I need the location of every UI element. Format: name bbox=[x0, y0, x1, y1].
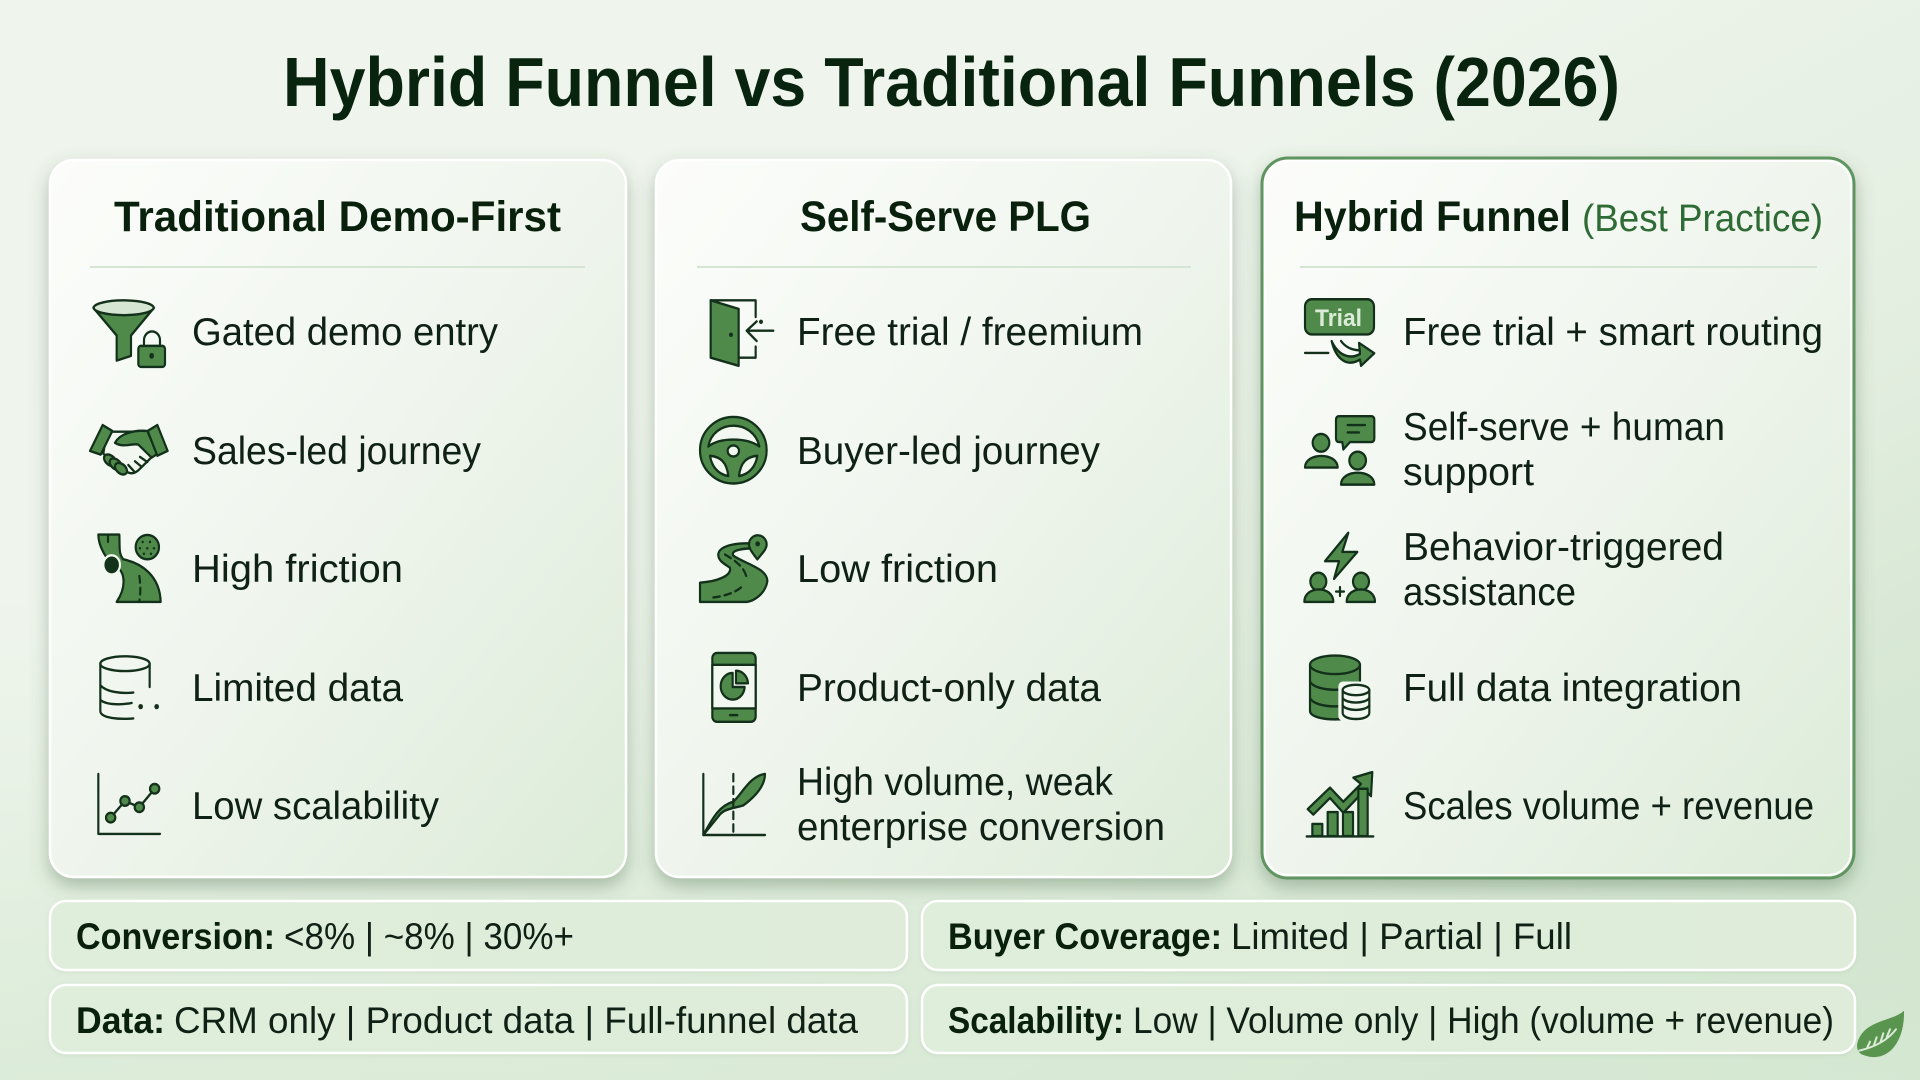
text: Full data integration: Full data integration bbox=[1403, 667, 1742, 710]
text: Self-serve + human support bbox=[1403, 406, 1725, 494]
icon: open door bbox=[711, 300, 773, 366]
text: Behavior-triggered assistance: assistance bbox=[1403, 571, 1576, 614]
text: Behavior-triggered assistance bbox=[1403, 526, 1724, 614]
summary: Conversion bbox=[50, 901, 907, 970]
summary: Scalability: Scalability: bbox=[948, 1000, 1124, 1041]
text: High friction: High friction bbox=[192, 548, 403, 591]
heading: Self-Serve PLG: Self-Serve PLG bbox=[800, 193, 1091, 241]
text: High volume, weak enterprise conversion bbox=[797, 761, 1165, 849]
icon: full database bbox=[1310, 656, 1373, 721]
summary: Buyer Coverage: Buyer Coverage: bbox=[948, 916, 1222, 957]
text: Sales-led journey: Sales-led journey bbox=[192, 430, 481, 473]
icon: smooth winding road bbox=[700, 535, 767, 602]
title: Hybrid Funnel vs Traditional Funnels (2026) bbox=[283, 43, 1620, 121]
summary: Conversion: Conversion: bbox=[76, 916, 275, 957]
summary: Data: Data: bbox=[76, 1000, 165, 1041]
summary: Buyer Coverage: Limited | Partial | Full bbox=[1231, 916, 1572, 957]
heading: Hybrid Funnel (Best Practice): Hybrid Funnel bbox=[1294, 193, 1571, 241]
icon: phone with pie chart bbox=[712, 653, 756, 722]
icon: steering wheel bbox=[700, 417, 767, 484]
icon: rising bars and arrow bbox=[1307, 772, 1373, 836]
icon: rough road bbox=[98, 535, 161, 602]
text: Self-serve + human support: support bbox=[1403, 451, 1534, 494]
text: Free trial / freemium: Free trial / freemium bbox=[797, 311, 1143, 354]
text: Free trial + smart routing: Free trial + smart routing bbox=[1403, 311, 1823, 354]
summary: Scalability: Low | Volume only | High (volume + revenue) bbox=[1133, 1000, 1834, 1041]
text: Limited data: Limited data bbox=[192, 667, 403, 710]
panel: Self-Serve PLG bbox=[656, 160, 1231, 877]
text: High volume, weak enterprise conversion: High volume, weak bbox=[797, 761, 1113, 804]
icon: lightning and people bbox=[1304, 533, 1375, 602]
text: Low friction: Low friction bbox=[797, 548, 998, 591]
icon: curve chart bbox=[703, 774, 765, 835]
icon: people with chat bbox=[1305, 416, 1374, 485]
text: Scales volume + revenue: Scales volume + revenue bbox=[1403, 785, 1814, 828]
icon: limited database bbox=[100, 656, 159, 719]
panel: Hybrid Funnel (highlighted) bbox=[1262, 158, 1854, 878]
summary: Buyer Coverage bbox=[922, 901, 1855, 970]
text: Self-serve + human support: Self-serve + human bbox=[1403, 406, 1725, 449]
icon: handshake bbox=[90, 425, 168, 477]
heading: Traditional Demo-First: Traditional Demo-First bbox=[114, 193, 561, 241]
summary: Conversion: <8% | ~8% | 30%+ bbox=[284, 916, 574, 957]
text: Behavior-triggered assistance: Behavior-triggered bbox=[1403, 526, 1724, 569]
icon: trial with routing arrow bbox=[1305, 299, 1374, 366]
text: Low scalability: Low scalability bbox=[192, 785, 439, 828]
text: Gated demo entry: Gated demo entry bbox=[192, 311, 498, 354]
panel: Traditional Demo-First bbox=[50, 160, 626, 877]
summary: Data bbox=[50, 985, 907, 1053]
summary: Scalability bbox=[922, 985, 1855, 1053]
icon: trial with routing arrow: Trial bbox=[1315, 305, 1362, 332]
heading: Hybrid Funnel (Best Practice) bbox=[1294, 193, 1823, 241]
text: Product-only data: Product-only data bbox=[797, 667, 1101, 710]
heading: Hybrid Funnel (Best Practice): (Best Practice) bbox=[1582, 198, 1823, 240]
icon: low growth chart bbox=[98, 774, 160, 834]
icon: funnel with lock bbox=[93, 300, 165, 367]
text: Buyer-led journey: Buyer-led journey bbox=[797, 430, 1100, 473]
text: High volume, weak enterprise conversion: enterprise conversion bbox=[797, 806, 1165, 849]
icon: leaf logo bbox=[1857, 1011, 1904, 1057]
summary: Data: CRM only | Product data | Full-funnel data bbox=[174, 1000, 858, 1041]
